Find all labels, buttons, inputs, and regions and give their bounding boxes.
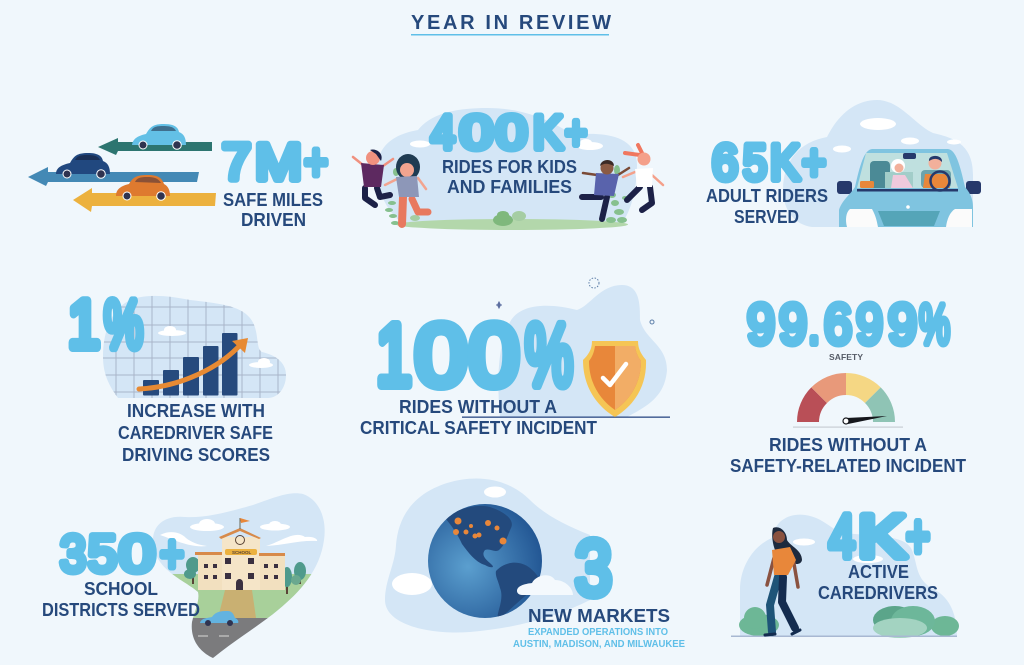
label: rides without a critical safety incident — [360, 397, 597, 438]
label: rides for kids and families — [442, 157, 577, 197]
stat: 100%: 0 — [415, 307, 467, 404]
label: rides without a safety-related incident: RIDES WITHOUT A — [769, 435, 927, 455]
description: expanded operations — [513, 626, 685, 650]
blob background — [377, 108, 637, 225]
stat: 100%: 0 — [469, 307, 519, 404]
panel: school districts served — [42, 493, 330, 663]
label: active caredrivers: ACTIVE — [848, 562, 909, 582]
rider — [891, 159, 913, 188]
clouds — [392, 486, 506, 595]
stat: 4K+: 4 — [829, 503, 855, 570]
icon: orange car — [116, 175, 170, 200]
clouds — [833, 118, 961, 152]
decorative sparkles — [496, 278, 654, 324]
icon: blue car — [200, 611, 238, 626]
landscape — [172, 574, 312, 658]
stat: 100%: 1 — [376, 307, 412, 404]
ground line — [462, 416, 670, 418]
icon: light blue car — [132, 124, 186, 149]
stat: 99.699%: 9 — [888, 292, 917, 356]
label: school districts served: SCHOOL — [84, 579, 158, 599]
label: rides for kids and families: AND FAMILIES — [447, 177, 572, 197]
stat: 65K+: K — [770, 134, 800, 190]
label: new markets: NEW MARKETS — [528, 606, 670, 626]
label: school districts served: DISTRICTS SERVED — [42, 600, 200, 620]
description: expanded operations: AUSTIN, MADISON, AND MILWAUKEE — [513, 638, 685, 650]
bar chart — [143, 333, 238, 396]
bushes — [739, 606, 959, 638]
ground — [396, 219, 628, 230]
clouds — [410, 139, 603, 150]
label: rides without a safety-related incident: SAFETY-RELATED INCIDENT — [730, 456, 966, 476]
label: active caredrivers: CAREDRIVERS — [818, 583, 938, 603]
arrow: blue — [28, 167, 199, 186]
icon: shield — [583, 341, 646, 417]
stat: 1%: 1 — [68, 286, 100, 362]
gauge label: SAFETY — [829, 352, 863, 362]
stat: 99.699%: 9 — [747, 292, 775, 356]
label: safe miles driven — [223, 190, 323, 230]
panel: rides for kids and families — [353, 106, 663, 230]
stat: 99.699%: 9 — [856, 292, 883, 356]
arrow: yellow — [73, 188, 216, 212]
panel: no safety-related incident — [730, 292, 966, 476]
stat: 400K+: K — [533, 106, 563, 158]
label: increase with caredriver safe driving scores: INCREASE WITH — [127, 401, 265, 421]
clouds — [160, 519, 317, 546]
stat: 7M+: 7 — [222, 134, 251, 190]
icon: school building: SCHOOL — [232, 550, 252, 555]
blob background — [103, 296, 286, 398]
stat: 99.699%: % — [919, 292, 950, 356]
label: adult riders served: ADULT RIDERS — [706, 186, 828, 206]
stat: 3: 3 — [575, 524, 612, 612]
stat: 65K+: + — [802, 134, 826, 190]
icon: trees — [184, 557, 306, 594]
blob background — [498, 285, 667, 417]
clouds — [158, 326, 273, 368]
stat: 400K+: + — [565, 106, 587, 158]
driver — [923, 156, 950, 190]
panel: new markets — [385, 478, 685, 650]
stat: 4K+: + — [906, 503, 930, 570]
blob background — [740, 515, 957, 636]
clouds — [793, 538, 883, 563]
stat: 99.699%: 9 — [779, 292, 807, 356]
blob background — [783, 100, 973, 227]
label: adult riders served — [706, 186, 828, 227]
bushes — [493, 211, 526, 226]
panel: safe miles driven — [28, 124, 328, 230]
label: rides for kids and families: RIDES FOR KIDS — [442, 157, 577, 177]
label: safe miles driven: SAFE MILES — [223, 190, 323, 210]
blob background — [153, 493, 325, 658]
label: rides without a safety-related incident — [730, 435, 966, 476]
stat: 65K+: 5 — [743, 134, 767, 190]
icon: school building — [195, 518, 285, 590]
label: school districts served — [42, 579, 200, 620]
stat: 350+: 5 — [88, 526, 117, 584]
label: rides without a critical safety incident: CRITICAL SAFETY INCIDENT — [360, 418, 597, 438]
icon: dark blue car — [56, 153, 110, 178]
icon: child three — [582, 160, 629, 219]
icon: woman walking — [765, 527, 802, 635]
stat: 350+: 0 — [119, 526, 155, 584]
gauge chart — [793, 373, 903, 428]
arrow: growth — [139, 338, 248, 389]
icon: car front with driver and rider — [837, 149, 981, 227]
arrow: green — [98, 138, 212, 155]
stat: 100%: % — [525, 307, 573, 404]
label: increase with caredriver safe driving scores: DRIVING SCORES — [122, 445, 270, 465]
icon: globe — [428, 504, 542, 620]
stat: 4K+: K — [858, 503, 906, 570]
stat: 400K+: 0 — [496, 106, 527, 158]
panel: no critical safety incident — [360, 278, 670, 438]
stat: 350+: 3 — [60, 526, 86, 584]
label: rides without a critical safety incident: RIDES WITHOUT A — [399, 397, 557, 417]
icon: child two — [385, 154, 428, 224]
panel: safe driving scores — [68, 286, 290, 465]
label: increase with caredriver safe driving scores — [118, 401, 273, 465]
plants — [385, 165, 628, 225]
map pins — [453, 518, 506, 544]
stat: 99.699%: 6 — [824, 292, 852, 356]
stat: 350+: + — [160, 526, 184, 584]
label: increase with caredriver safe driving scores: CAREDRIVER SAFE — [118, 423, 273, 443]
label: safe miles driven: DRIVEN — [241, 210, 306, 230]
stat: 1%: % — [104, 286, 143, 362]
panel: adult riders served — [706, 100, 981, 227]
label: adult riders served: SERVED — [734, 207, 799, 227]
icon: child four — [623, 145, 663, 210]
icon: child one — [353, 150, 393, 205]
title: YEAR IN REVIEW — [411, 12, 611, 34]
description: expanded operations: EXPANDED OPERATIONS INTO — [528, 626, 668, 638]
panel: active caredrivers — [731, 503, 959, 638]
stat: 99.699%: . — [808, 292, 820, 356]
stat: 400K+: 0 — [460, 106, 493, 158]
ground line — [731, 636, 957, 637]
label: active caredrivers — [818, 562, 938, 603]
blob background — [385, 478, 590, 633]
stat: 65K+: 6 — [712, 134, 738, 190]
stat: 7M+: M — [255, 134, 302, 190]
stat: 7M+: + — [304, 134, 328, 190]
stat: 400K+: 4 — [431, 106, 455, 158]
cloud over globe — [517, 575, 573, 595]
